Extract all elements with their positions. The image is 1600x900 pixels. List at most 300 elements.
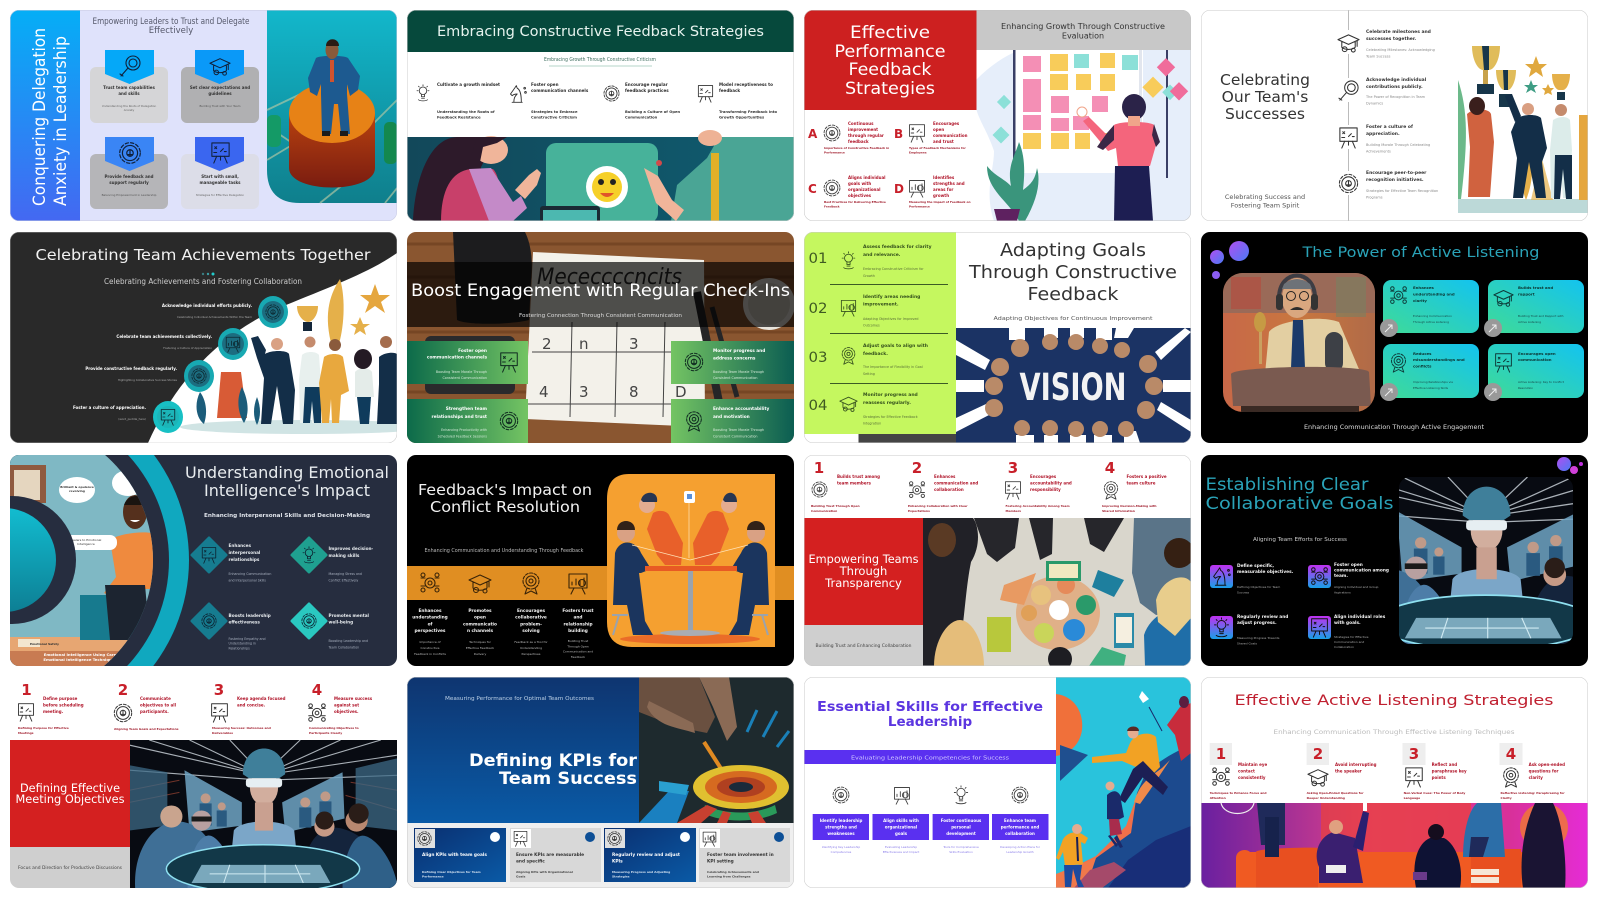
image: desk with notepad: 3 <box>629 335 639 353</box>
item C: objectives <box>848 193 872 198</box>
panel: Empowering Teams Through Transparency <box>804 455 1194 671</box>
item: milestones: Celebrate milestones and <box>1366 30 1431 35</box>
item: contributions: Acknowledge individual <box>1366 78 1426 83</box>
item 1: Builds trust among <box>837 474 880 479</box>
item 1: Defining Purpose for Effective <box>18 726 69 730</box>
card: measurable KPIs: Aligning KPIs with Organizational <box>516 870 573 874</box>
step 01: and relevance. <box>863 252 901 258</box>
item 4: objectives. <box>334 709 359 714</box>
illustration: ringed person scene: Brilliant & opulence <box>60 485 94 489</box>
strategy 4: questions for <box>1529 768 1559 774</box>
item 1: 1 <box>814 459 824 477</box>
title band: Boost Engagement with Regular Check-Ins <box>411 281 790 301</box>
orange band with icons <box>407 566 794 600</box>
card: measurable KPIs: Goals <box>516 874 526 878</box>
item: align roles: Communication and <box>1334 640 1364 644</box>
item A: Continuous <box>848 121 874 126</box>
item: feedback practices: feedback practices <box>625 88 669 93</box>
item D: Performance <box>909 204 930 208</box>
strategy 4: clarity <box>1529 775 1543 780</box>
card: set clear expectations <box>181 50 259 123</box>
item: peer recognition: Programs <box>1366 196 1383 200</box>
title block: Meeting Objectives <box>16 792 125 806</box>
card: trust team capabilities: Anxiety <box>124 108 135 112</box>
panel: The Power of Active Listening <box>1201 232 1588 443</box>
card: align KPIs <box>414 828 506 882</box>
item 3: Members <box>1006 509 1021 513</box>
title: Understanding Emotional <box>185 463 389 482</box>
illustration: ringed person scene: revolving <box>69 489 85 493</box>
strategy 2: Deeper Understanding <box>1307 796 1345 800</box>
skill: identify strengths: strengths and <box>825 824 857 829</box>
strategy 3: 3 <box>1409 745 1419 763</box>
strategy 3: paraphrase key <box>1432 768 1467 774</box>
title: Feedback's Impact on <box>418 481 592 499</box>
item: achievements collectively <box>116 328 248 360</box>
column: relationship building <box>562 608 594 659</box>
title block: Effective <box>850 23 930 43</box>
image: desk with notepad: n <box>579 335 589 353</box>
item: relationships: Enhances <box>228 543 251 548</box>
item: objectives <box>1210 563 1294 594</box>
item: objectives: Success <box>1237 590 1250 594</box>
step 03: Setting <box>863 372 875 376</box>
subtitle band: Evaluation <box>1062 32 1104 40</box>
item D: strengths and <box>933 181 965 186</box>
card: team involvement: Celebrating Achievements and <box>707 870 759 874</box>
column: problem solving: Feedback as a Tool for <box>514 640 548 644</box>
item: decision making: Improves decision- <box>328 546 373 551</box>
item: open channels: Constructive Criticism <box>531 116 577 120</box>
strategy 1: Techniques to Enhance Focus and <box>1210 791 1267 795</box>
item 2 <box>908 459 978 513</box>
decoration dots and subtitle: Celebrating Achievements and Fostering Collaboration <box>104 277 302 286</box>
item: culture of appreciation <box>73 401 183 433</box>
item A: feedback <box>848 139 869 144</box>
card: understanding: clarity <box>1413 298 1427 303</box>
item: leadership: Relationships <box>228 646 250 650</box>
item 4: Communicating Objectives to <box>309 726 359 730</box>
card: team involvement: KPI setting <box>707 858 734 864</box>
card: monitor progress: Monitor progress and <box>713 349 765 354</box>
step 03 <box>808 333 948 376</box>
subtitle: Celebrating Success and <box>1225 193 1305 201</box>
image: desk with notepad: 4 <box>539 383 549 401</box>
skill: team performance: Leadership Growth <box>1006 850 1034 854</box>
item: contributions <box>1336 77 1427 106</box>
illustration: team with trophies <box>1458 46 1588 213</box>
title <box>469 751 638 789</box>
title block: Transparency <box>824 576 902 590</box>
skill: align with goals: Effectiveness and Impact <box>883 850 920 854</box>
item: align roles: Strategies for Effective <box>1334 635 1368 639</box>
title: Celebrating <box>1220 71 1310 89</box>
strategy 4: Ask open-ended <box>1529 762 1565 767</box>
item 1: 1 <box>21 681 32 699</box>
panel: Feedback's Impact on Conflict Resolution <box>407 455 794 666</box>
column: relationship building: relationship <box>563 621 593 627</box>
item 3 <box>212 681 286 735</box>
title: Adapting Goals <box>1000 241 1146 261</box>
title <box>185 463 389 500</box>
strategy 2 <box>1307 743 1377 800</box>
card: trust team capabilities: and skills <box>118 91 140 96</box>
card: open communication: communication channels <box>427 354 487 360</box>
title <box>968 241 1177 305</box>
subtitle <box>544 57 656 66</box>
item: feedback practices <box>604 82 680 120</box>
column: perspectives: Feedback in Conflicts <box>414 652 446 656</box>
card: measurable KPIs: Ensure KPIs are measurable <box>516 853 584 858</box>
item D: growth <box>933 193 949 198</box>
title: vertical delegation heading: Anxiety in Leadership <box>51 36 71 206</box>
card: accountability <box>671 399 794 443</box>
skill: align with goals: organizational <box>885 824 918 829</box>
image: desk with notepad: 3 <box>579 383 589 401</box>
subtitle: Enhancing Communication Through Effective Listening Techniques <box>1274 729 1514 736</box>
column: perspectives: Constructive <box>420 646 440 650</box>
item: relationships: interpersonal <box>228 550 261 555</box>
item 3: Fostering Accountability Among Team <box>1006 504 1070 508</box>
item 2: collaboration <box>934 487 964 492</box>
title block: Performance <box>834 42 946 62</box>
item: decision making: Conflict Effectively <box>328 578 358 582</box>
title: Conflict Resolution <box>430 498 580 516</box>
panel: Celebrating Team Achievements Together <box>10 232 430 443</box>
card: strengthen relationships: Scheduled Feedback Sessions <box>438 434 487 438</box>
strategy 2: the speaker <box>1335 768 1362 774</box>
column: open channels: n channels <box>467 628 494 634</box>
column: open channels: Promotes <box>468 609 492 614</box>
item 4: 4 <box>1105 459 1115 477</box>
strategy 4: 4 <box>1506 745 1516 763</box>
subtitle: Fostering Team Spirit <box>1231 202 1300 210</box>
item: appreciation: appreciation. <box>1366 131 1400 137</box>
card: set clear expectations: Building Trust with Your Team <box>200 104 241 108</box>
column: open channels: open <box>474 616 486 621</box>
title block <box>10 740 130 847</box>
card: set clear expectations: guidelines <box>208 91 232 96</box>
card: measurable KPIs: and specific <box>516 858 545 864</box>
item A: through regular <box>848 133 884 138</box>
subtitle: Embracing Growth Through Constructive Criticism <box>544 57 656 63</box>
item A: A <box>808 127 818 141</box>
skill: personal development: personal <box>951 824 971 829</box>
column: problem solving: Perspectives <box>522 652 541 656</box>
item 2: Expectations <box>908 509 930 513</box>
column: relationship building: building <box>568 628 588 634</box>
step 03: The Importance of Flexibility in Goal <box>863 365 923 369</box>
item: align roles: Collaboration <box>1334 645 1354 649</box>
title block: Empowering Teams <box>808 552 919 566</box>
strategy 1: Maintain eye <box>1238 762 1267 767</box>
illustration: meeting at table <box>607 474 775 647</box>
item D: areas for <box>933 187 953 192</box>
illustration: ringed person scene: Intelligence <box>77 542 95 546</box>
strategy 4: Clarity <box>1500 796 1512 800</box>
item: peer recognition: Encourage peer-to-peer <box>1366 171 1426 176</box>
item: appreciation: Foster a culture of <box>1366 125 1413 130</box>
panel: Establishing Clear Collaborative Goals <box>1201 455 1600 666</box>
column: relationship building: Fosters trust <box>562 609 594 614</box>
step 02: Outcomes <box>863 324 880 328</box>
item: objectives: Defining Objectives for Team <box>1237 585 1280 589</box>
column: perspectives: understanding <box>412 615 448 621</box>
skill: team performance: collaboration <box>1005 831 1035 836</box>
item: growth mindset: Feedback Resistance <box>437 116 481 120</box>
item: milestones: Celebrating Milestones: Acknowledging <box>1366 48 1435 52</box>
image: two people and smiley <box>407 130 794 226</box>
item 3: and concise. <box>237 702 266 708</box>
illustration: ringed person scene: Emotional Safety <box>30 642 59 646</box>
title: Essential Skills for Effective <box>817 699 1043 715</box>
card: understanding: understanding and <box>1413 292 1455 296</box>
strategy 1: contact <box>1238 768 1255 774</box>
item B <box>894 121 968 154</box>
item 4: 4 <box>312 681 322 699</box>
item: milestones: Team Success <box>1365 54 1391 58</box>
item: communication: Aspirations <box>1334 590 1351 594</box>
title block: Strategies <box>845 79 935 99</box>
card: monitor progress: Boosting Team Morale Through <box>713 370 764 374</box>
decorative purple circles <box>1210 241 1249 279</box>
subtitle: Enhancing Communication and Understanding Through Feedback <box>424 548 584 554</box>
item: constructive feedback: Highlighting Collaborative Success Stories <box>118 378 178 382</box>
item: open channels: communication channels <box>531 88 589 93</box>
item: decision making: Managing Stress and <box>328 572 362 576</box>
title: Our Team's <box>1222 88 1308 106</box>
card: team involvement <box>699 828 790 882</box>
item 1: Meetings <box>18 731 34 735</box>
item 2: Aligning Team Goals and Expectations <box>114 727 179 731</box>
step 01: Assess feedback for clarity <box>863 245 932 250</box>
title band: Fostering Connection Through Consistent Communication <box>519 313 683 319</box>
item: review progress: Regularly review and <box>1237 615 1288 620</box>
strategy 3: points <box>1432 775 1446 780</box>
card: open communication: Encourages open <box>1518 351 1556 356</box>
card: review KPIs: Regularly review and adjust <box>612 853 680 858</box>
item: peer recognition: recognition initiatives. <box>1366 177 1424 183</box>
panel: Conquering Delegation Anxiety in Leadership <box>10 10 397 221</box>
card: misunderstandings: conflicts <box>1413 363 1432 368</box>
step 02: 02 <box>808 301 828 317</box>
decorative circles <box>1557 457 1583 474</box>
panel: Defining KPIs for Team Success <box>407 677 794 888</box>
item: contributions: The Power of Recognition in Team <box>1366 95 1425 99</box>
column: problem solving <box>514 608 548 656</box>
skill: identify strengths: Identify leadership <box>820 818 862 823</box>
item: appreciation: Building Morale Through Celebrating <box>1366 143 1430 147</box>
item 1: Define purpose <box>43 696 77 701</box>
item A: improvement <box>848 127 878 132</box>
item B: Employees <box>909 150 927 154</box>
card: team involvement: Learning from Challenges <box>707 874 751 878</box>
column: relationship building: Building Trust <box>568 639 588 643</box>
item 4: Shared Information <box>1102 509 1135 513</box>
skill: identify strengths: Identifying Key Leadership <box>822 845 860 849</box>
subtitle band: Evaluating Leadership Competencies for Success <box>851 756 1009 762</box>
card: team involvement: Foster team involvement in <box>707 853 774 858</box>
image: figure on orange pedestal <box>267 10 397 203</box>
panel: Understanding Emotional Intelligence's Impact <box>0 385 397 735</box>
illustration: ringed person scene: Emotional Intelligence Using Care <box>44 652 116 657</box>
title block <box>804 10 976 110</box>
card: monitor progress: address concerns <box>713 356 756 362</box>
strategy 3: Non-Verbal Cues: The Power of Body <box>1404 791 1465 795</box>
panel: Effective Performance Feedback Strategies <box>804 10 1192 221</box>
item 3 <box>1006 459 1072 513</box>
card: understanding: Enhances <box>1413 285 1434 290</box>
item: relationships: Enhancing Communication <box>228 572 271 576</box>
step 02: Identify areas needing <box>863 295 920 300</box>
item: culture of appreciation: (word_puddle_here) <box>118 417 146 421</box>
item 2: communication and <box>934 480 978 486</box>
card: open communication <box>407 341 528 384</box>
title: Intelligence's Impact <box>204 481 370 500</box>
item: relationships <box>192 538 271 582</box>
card: start small: manageable tasks <box>199 180 241 185</box>
card: review KPIs: Strategies <box>612 874 630 878</box>
illustration: celebrating team <box>180 279 397 434</box>
item: objectives: measurable objectives. <box>1237 569 1294 575</box>
skill: team performance <box>992 787 1048 854</box>
skill: identify strengths <box>813 787 869 854</box>
image: futuristic meeting room <box>129 740 398 893</box>
item: achievements collectively: Celebrate team achievements collectively. <box>116 334 212 339</box>
strategy 1: Attention <box>1210 796 1226 800</box>
subtitle band <box>976 10 1192 50</box>
card: misunderstandings: Improving Relationships via <box>1413 380 1453 384</box>
item: feedback practices: Communication <box>625 116 658 120</box>
card: open communication <box>1484 344 1584 401</box>
image: hand and target chart <box>639 677 794 823</box>
title: Team Success <box>499 769 637 789</box>
item: decision making: making skills <box>328 553 360 558</box>
item: align roles: with goals. <box>1334 620 1361 626</box>
subtitle band <box>804 750 1056 764</box>
strategy 3 <box>1402 743 1467 800</box>
item A: Importance of Constructive Feedback in <box>824 146 889 150</box>
subtitle block <box>10 847 130 888</box>
strategy 3: Language <box>1404 796 1420 800</box>
item: align roles <box>1308 614 1386 649</box>
step 04: reassess regularly. <box>863 400 911 406</box>
card: start small <box>181 137 259 209</box>
strategy 4 <box>1500 743 1565 800</box>
column: open channels: Techniques for <box>469 640 491 644</box>
step 02: improvement. <box>863 302 899 308</box>
card: review KPIs <box>604 828 696 882</box>
panel: Celebrating Our Team's Successes <box>1201 10 1588 221</box>
image: desk with notepad: Mececcccncits <box>537 265 682 290</box>
item: communication: Foster open <box>1334 563 1363 568</box>
item: wellbeing: Promotes mental <box>328 613 369 618</box>
title <box>1206 475 1394 513</box>
column: perspectives <box>412 608 448 656</box>
item: align roles: Align individual roles <box>1334 615 1385 620</box>
card: understanding <box>1380 280 1479 337</box>
title: Successes <box>1225 105 1305 123</box>
skill: team performance: performance and <box>1001 824 1039 829</box>
illustration: team climbing mountain <box>1056 677 1191 888</box>
skill: personal development: Tools for Comprehensive <box>943 845 979 849</box>
item: communication: Aligning Individual and Group <box>1334 585 1378 589</box>
step 01: 01 <box>808 251 828 267</box>
item: review progress <box>1210 614 1288 646</box>
column: open channels: Effective Feedback <box>466 646 494 650</box>
column: relationship building: Through Open <box>566 644 589 648</box>
item: milestones: successes together. <box>1366 36 1416 42</box>
skill: align with goals: goals <box>895 831 908 836</box>
card: trust team capabilities: Understanding the Roots of Delegation <box>102 104 156 108</box>
card: trust and rapport: Builds trust and <box>1518 285 1553 290</box>
column: relationship building: and <box>573 615 583 621</box>
item 4: Measure success <box>334 696 372 701</box>
item: model receptiveness: feedback <box>719 88 740 93</box>
item D <box>894 175 971 208</box>
illustration: ringed person scene <box>0 385 189 735</box>
card: strengthen relationships: Enhancing Productivity with <box>441 428 487 432</box>
card: trust and rapport <box>1484 280 1584 337</box>
item 3: accountability and <box>1030 480 1072 486</box>
strategy 3: Reflect and <box>1432 762 1457 767</box>
item: leadership: Boosts leadership <box>228 613 271 618</box>
item: model receptiveness <box>698 82 778 120</box>
column: problem solving: problem- <box>520 621 542 627</box>
item: objectives: Define specific, <box>1237 564 1274 569</box>
column: relationship building: Feedback <box>571 655 585 659</box>
item: milestones <box>1336 29 1435 58</box>
item: constructive feedback: Provide constructive feedback regularly. <box>85 366 177 371</box>
skill: personal development: Foster continuous <box>941 818 981 823</box>
item: review progress: adjust progress. <box>1237 620 1277 626</box>
column: problem solving: Encourages <box>517 609 545 614</box>
item: feedback practices: Building a Culture of Open <box>625 110 680 114</box>
step 04: 04 <box>808 398 828 414</box>
card: align KPIs: Defining Clear Objectives for Team <box>422 870 481 874</box>
card: align KPIs: Performance <box>422 874 444 878</box>
column: open channels: Delivery <box>474 652 486 656</box>
item: model receptiveness: Growth Opportunities <box>719 116 765 120</box>
subtitle: Adapting Objectives for Continuous Improvement <box>994 316 1153 322</box>
item: growth mindset: Cultivate a growth mindset <box>437 82 500 87</box>
item: constructive feedback <box>85 360 214 392</box>
item 4 <box>1102 459 1167 513</box>
item 3: Deliverables <box>212 731 233 735</box>
title block: Through <box>839 564 887 578</box>
card: open communication: Active Listening: Key to Conflict <box>1518 380 1564 384</box>
item 1: meeting. <box>43 709 64 714</box>
card: trust and rapport: Active Listening <box>1518 320 1541 324</box>
card: misunderstandings: Effective Listening Skills <box>1413 386 1449 390</box>
title: The Power of Active Listening <box>1301 245 1540 261</box>
card: strengthen relationships <box>407 399 528 443</box>
card: provide feedback: support regularly <box>109 180 149 185</box>
step 02 <box>808 284 948 328</box>
item: relationships: relationships <box>228 557 260 562</box>
item: leadership: Fostering Empathy and <box>228 637 266 641</box>
title block <box>804 518 923 625</box>
item 2: Enhancing Collaboration with Clear <box>908 504 968 508</box>
panel: Effective Active Listening Strategies <box>1201 677 1588 888</box>
item 2: 2 <box>118 681 128 699</box>
item C <box>808 175 886 208</box>
item 3: Measuring Success: Outcomes and <box>212 726 271 730</box>
item: achievements collectively: Fostering a Culture of Appreciation <box>163 346 212 350</box>
title second line: Leadership <box>888 714 972 730</box>
panel: Boost Engagement with Regular Check-Ins <box>407 232 795 443</box>
item 2: Communicate <box>140 696 171 701</box>
